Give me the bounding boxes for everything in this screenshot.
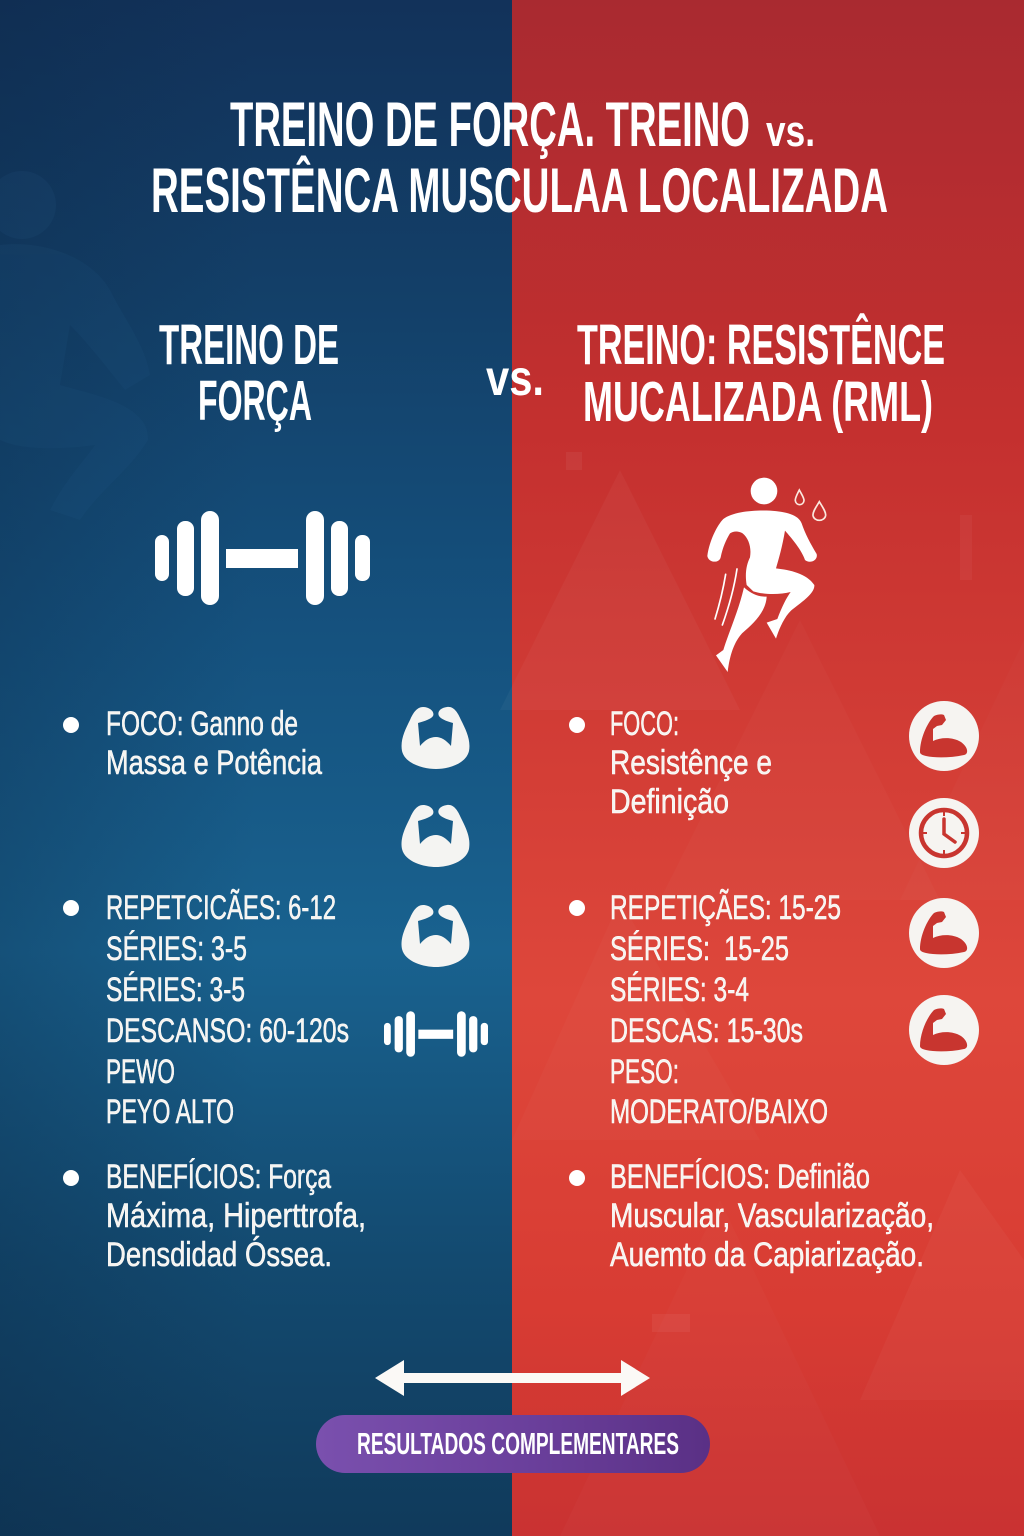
bullet: focus: FOCO: Ganno de: [106, 705, 298, 743]
icon: clock: [909, 798, 979, 868]
icons: endurance column: [909, 701, 979, 1065]
background: blue left half: [0, 0, 512, 1536]
icon: flexed arm 3: [909, 995, 979, 1065]
bullet: benefits: [63, 1158, 366, 1274]
bullet: parameters: SÉRIES: 3-4: [610, 971, 749, 1009]
bullet: focus: [63, 705, 322, 782]
icon: small dumbbell: [384, 1011, 488, 1057]
icons: strength muscle column: [384, 707, 488, 1057]
icon: dumbbell: [155, 511, 370, 605]
bullet: parameters: PEYO ALTO: [106, 1093, 234, 1131]
decorative triangles on red side: [500, 452, 1024, 1536]
heading: strength training: FORÇA: [198, 369, 312, 433]
bullet: benefits: Auemto da Capiarização.: [610, 1236, 924, 1274]
decorative ghost runner on blue side: [0, 171, 150, 520]
icon: flexed arm 2: [909, 898, 979, 968]
bullet: parameters: DESCAS: 15-30s: [610, 1012, 803, 1050]
vs label: vs.: [486, 350, 544, 406]
bullet: benefits: Densdidad Óssea.: [106, 1236, 332, 1274]
bullet: focus: Resistênçe e: [610, 744, 772, 782]
heading: muscular endurance training: [577, 312, 945, 434]
bullet: parameters: DESCANSO: 60-120s: [106, 1012, 349, 1050]
callout: complementary results: RESULTADOS COMPLEMENTARES: [357, 1426, 679, 1461]
bullet: parameters: REPETCICÃES: 6-12: [106, 889, 336, 927]
bullet: parameters: SÉRIES: 15-25: [610, 930, 789, 968]
bullet: benefits: BENEFÍCIOS: Definião: [610, 1158, 870, 1196]
icon: muscle 2: [402, 805, 469, 867]
icon: flexed arm 1: [909, 701, 979, 771]
bullet: parameters: REPETIÇÃES: 15-25: [610, 889, 841, 927]
arrow: double-headed: [375, 1360, 650, 1396]
bullet: benefits: [569, 1158, 934, 1274]
callout: complementary results: [316, 1415, 710, 1473]
bullet: focus: Definição: [610, 783, 729, 821]
icon: running figure with sweat: [707, 478, 826, 672]
panel: strength training details: [63, 705, 366, 1274]
title: [151, 90, 888, 226]
heading: strength training: [159, 313, 339, 433]
bullet: parameters: PESO:: [610, 1053, 679, 1091]
bullet: benefits: Muscular, Vascularização,: [610, 1197, 934, 1235]
bullet: focus: [569, 705, 772, 821]
bullet: focus: Massa e Potência: [106, 744, 322, 782]
heading: strength training: TREINO DE: [159, 313, 339, 377]
bullet: benefits: BENEFÍCIOS: Força: [106, 1158, 331, 1196]
background: red right half: [512, 0, 1024, 1536]
bullet: parameters: PEWO: [106, 1053, 175, 1091]
bullet: parameters: [569, 889, 841, 1131]
title vs: vs.: [766, 107, 815, 156]
bullet: parameters: MODERATO/BAIXO: [610, 1093, 828, 1131]
bullet: parameters: SÉRIES: 3-5: [106, 971, 245, 1009]
bullet: focus: FOCO:: [610, 705, 679, 743]
bullet: parameters: [63, 889, 349, 1131]
panel: endurance training details: [569, 705, 934, 1274]
icon: muscle 1: [402, 707, 469, 769]
bullet: benefits: Máxima, Hiperttrofa,: [106, 1197, 366, 1235]
icon: muscle 3: [402, 905, 469, 967]
bullet: parameters: SÉRIES: 3-5: [106, 930, 247, 968]
